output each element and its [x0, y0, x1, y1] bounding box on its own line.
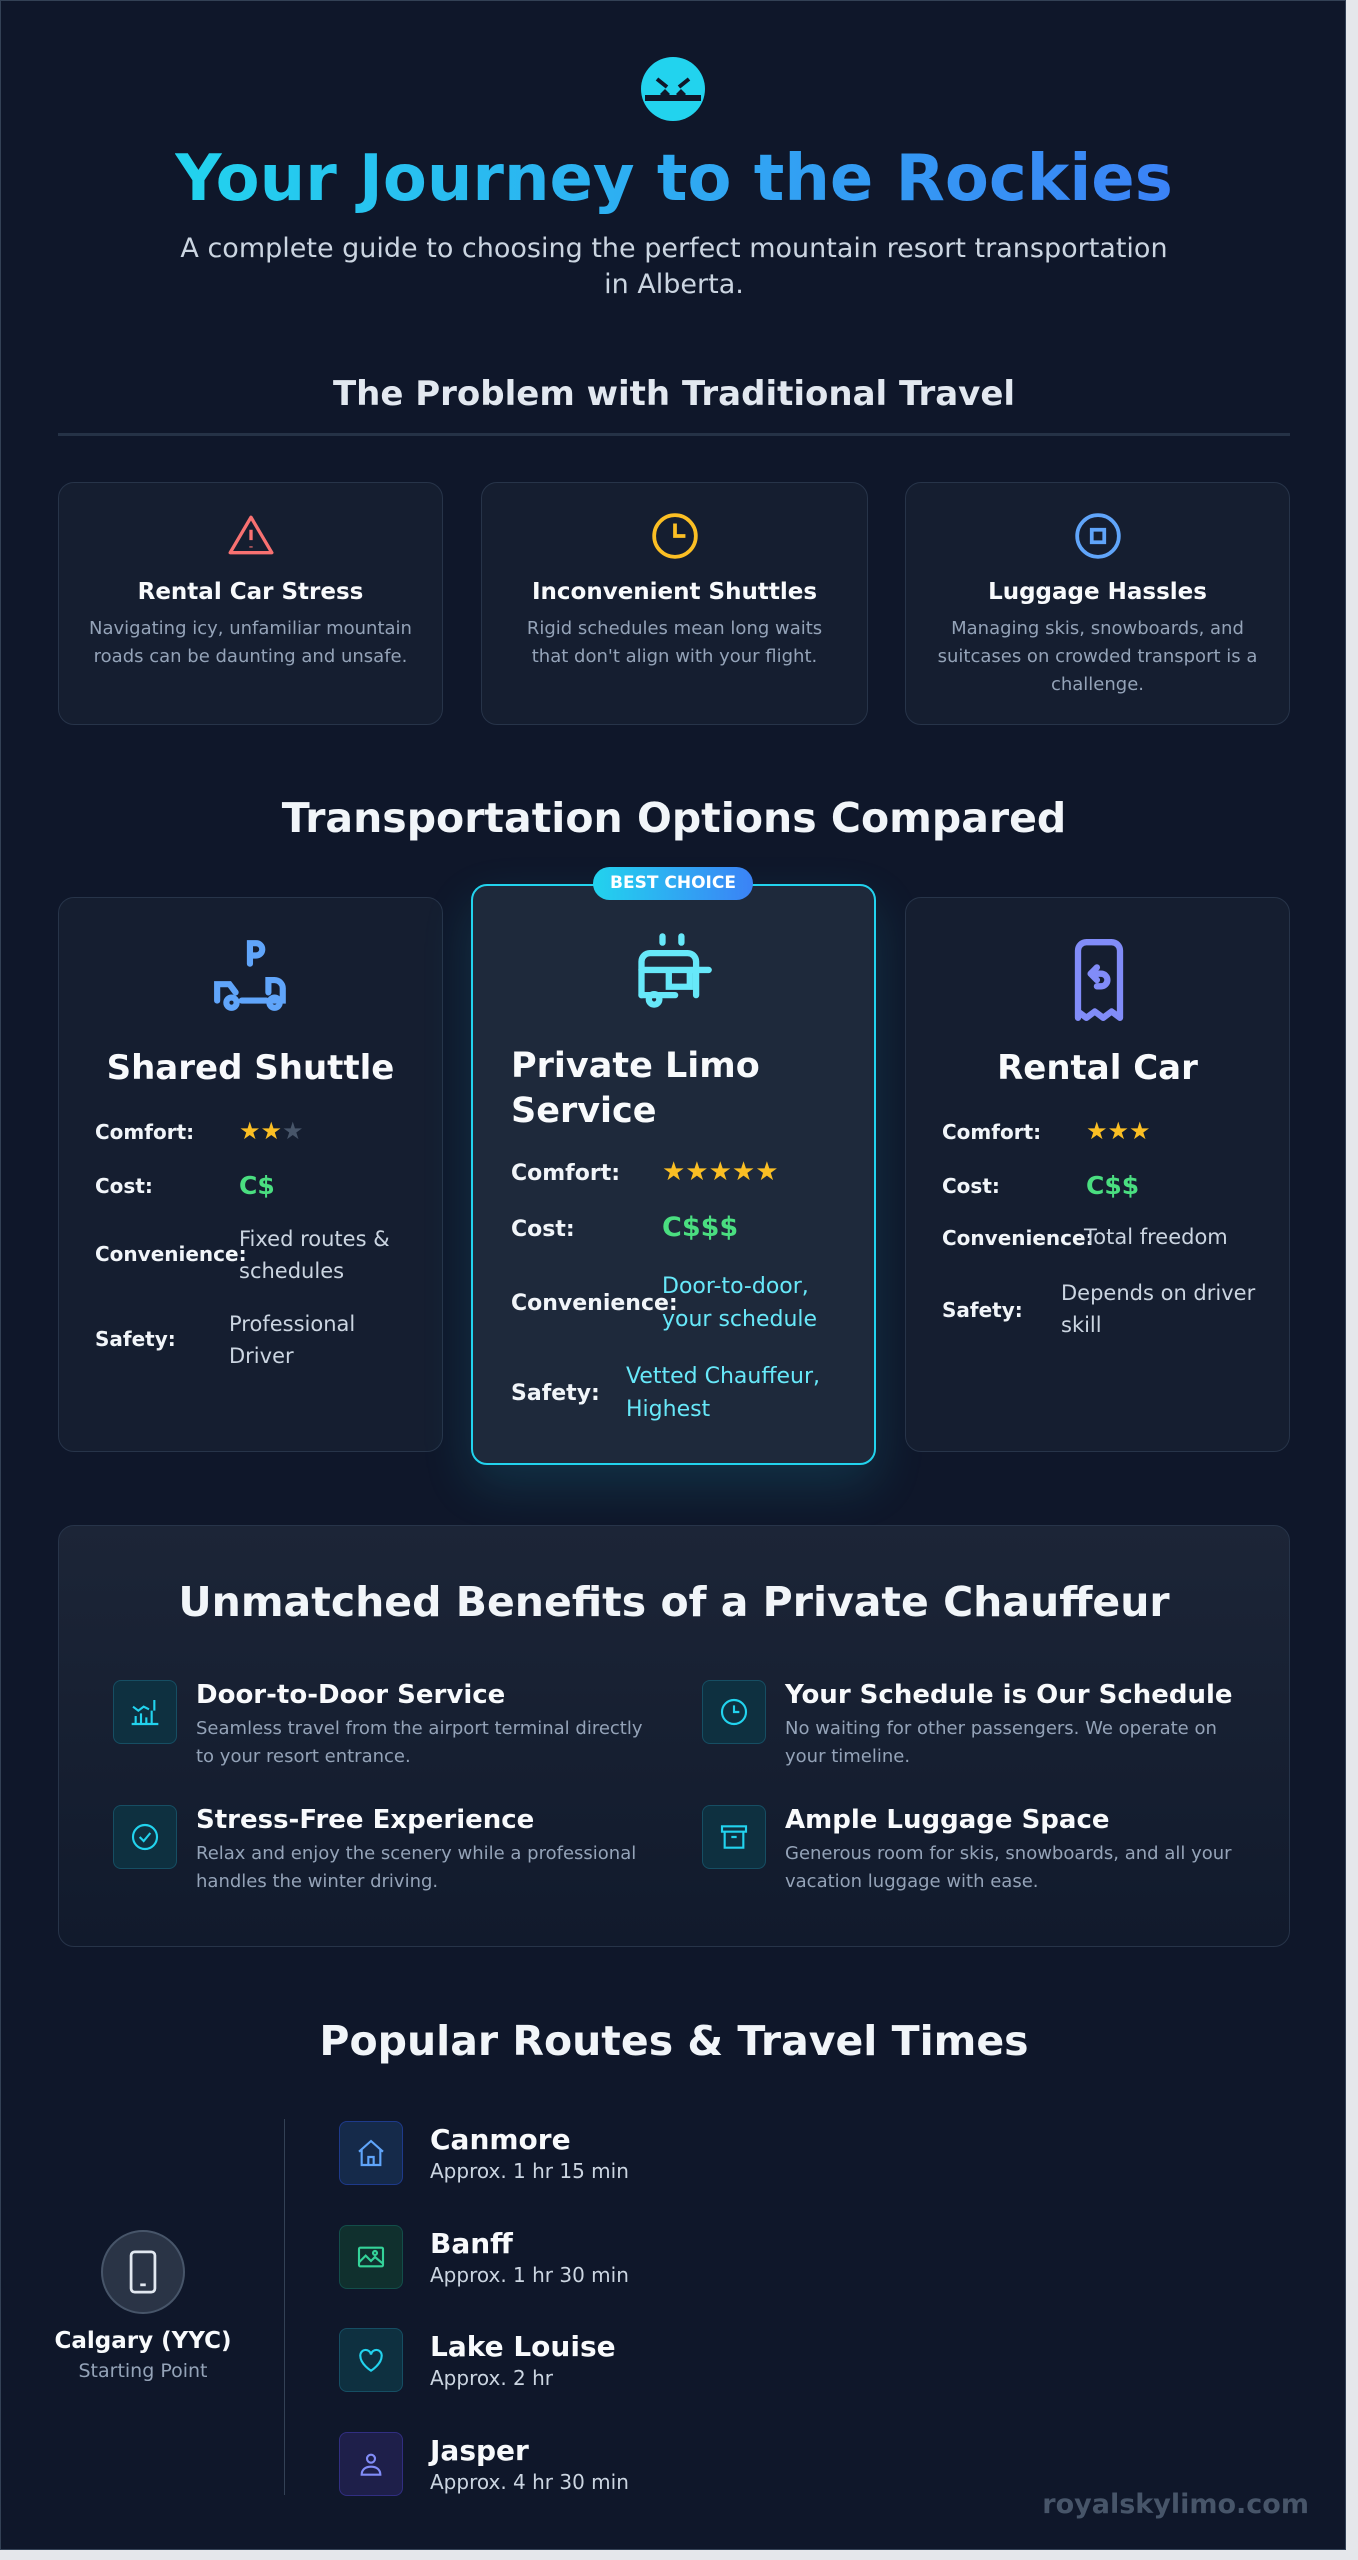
- benefit: schedule: Your Schedule is Our Schedule: [785, 1680, 1233, 1710]
- panel: rental car: Total freedom: [1084, 1225, 1228, 1249]
- panel: shared shuttle: Fixed routes & schedules: [239, 1227, 390, 1283]
- panel: shared shuttle: C$: [239, 1171, 275, 1200]
- title: Rental Car: [997, 1048, 1198, 1088]
- route: Lake Louise: Approx. 2 hr: [430, 2366, 553, 2390]
- benefit: luggage: Ample Luggage Space: [785, 1805, 1110, 1835]
- panel: luggage hassles: [905, 482, 1290, 725]
- route: Banff: [339, 2225, 629, 2289]
- panel: private limo (best choice): ★★★★★: [662, 1157, 779, 1187]
- heading: problem: The Problem with Traditional Travel: [333, 374, 1015, 414]
- panel: shared shuttle: Convenience:: [95, 1242, 247, 1266]
- panel: shared shuttle: ★★★: [239, 1117, 304, 1145]
- panel: shared shuttle: [58, 897, 443, 1452]
- icon: logo: [641, 57, 705, 121]
- benefit: stress-free: Relax and enjoy the scenery while a professional handles the winter driving.: [196, 1843, 636, 1892]
- icon: clock: [652, 513, 698, 559]
- panel: rental car: [905, 897, 1290, 1452]
- panel: shared shuttle: Safety:: [95, 1327, 176, 1351]
- panel: rental car: Safety:: [942, 1298, 1023, 1322]
- title: Service: [511, 1091, 657, 1131]
- icon: square circle: [1075, 513, 1121, 559]
- panel: private limo (best choice): Cost:: [511, 1217, 575, 1242]
- badge: [593, 867, 753, 900]
- benefit: luggage: Generous room for skis, snowboards, and all your vacation luggage with ease.: [785, 1843, 1232, 1892]
- benefit: door-to-door: Door-to-Door Service: [196, 1680, 505, 1710]
- benefit: door-to-door: Seamless travel from the airport terminal directly to your resort entrance.: [196, 1718, 643, 1767]
- benefit: schedule: No waiting for other passengers. We operate on your timeline.: [785, 1718, 1217, 1767]
- rows: Comfort:: [95, 1120, 194, 1144]
- panel: rental car: Cost:: [942, 1174, 1000, 1198]
- origin: Calgary: Calgary (YYC): [54, 2328, 232, 2354]
- panel: shared shuttle: Professional Driver: [229, 1312, 355, 1368]
- heading: options compared: Transportation Options Compared: [282, 794, 1066, 842]
- origin: Calgary: [54, 2230, 232, 2382]
- route: Jasper: Jasper: [430, 2434, 529, 2467]
- benefit: stress-free: Stress-Free Experience: [196, 1805, 534, 1835]
- origin: Calgary: Starting Point: [78, 2360, 208, 2382]
- panel: rental car stress: [58, 482, 443, 725]
- title: Private Limo: [511, 1046, 760, 1086]
- rows: Comfort:: [511, 1161, 620, 1186]
- badge: BEST CHOICE: [610, 873, 736, 893]
- route: Canmore: [339, 2121, 629, 2185]
- icon: phone: [101, 2230, 185, 2314]
- route: Banff: Approx. 1 hr 30 min: [430, 2263, 629, 2287]
- route: Jasper: Approx. 4 hr 30 min: [430, 2470, 629, 2494]
- heading: routes: Popular Routes & Travel Times: [319, 2017, 1029, 2065]
- panel: benefits: [58, 1525, 1290, 1947]
- footer: website: royalskylimo.com: [1042, 2489, 1309, 2520]
- route: Lake Louise: [339, 2328, 616, 2392]
- panel: rental car stress: Navigating icy, unfamiliar mountain roads can be daunting and unsafe.: [89, 618, 412, 667]
- panel: rental car: Depends on driver skill: [1061, 1281, 1255, 1337]
- panel: private limo (best choice): [471, 884, 876, 1465]
- panel: private limo (best choice): Vetted Chauffeur, Highest: [626, 1364, 820, 1422]
- heading: Unmatched Benefits of a Private Chauffeur: [178, 1578, 1170, 1626]
- panel: private limo (best choice): Safety:: [511, 1381, 600, 1406]
- title: Shared Shuttle: [107, 1048, 394, 1088]
- route: Lake Louise: Lake Louise: [430, 2330, 616, 2363]
- route: Jasper: [339, 2432, 629, 2496]
- panel: luggage hassles: Managing skis, snowboards, and suitcases on crowded transport is a challenge.: [938, 618, 1257, 695]
- benefit: luggage: [702, 1805, 1232, 1892]
- panel: shared shuttle: Cost:: [95, 1174, 153, 1198]
- panel: rental car: C$$: [1086, 1171, 1139, 1200]
- title: Your Journey to the Rockies: [175, 142, 1173, 216]
- subtitle: A complete guide to choosing the perfect mountain resort transportation in Alberta.: [180, 233, 1168, 300]
- icon: warning: [228, 516, 274, 554]
- text: Inconvenient Shuttles: [532, 579, 817, 605]
- panel: private limo (best choice): Convenience:: [511, 1291, 678, 1316]
- icon: limo: [638, 933, 712, 1008]
- route: Canmore: Approx. 1 hr 15 min: [430, 2159, 629, 2183]
- text: Luggage Hassles: [988, 579, 1207, 605]
- icon: rental receipt: [1074, 939, 1124, 1021]
- benefit: stress-free: [113, 1805, 636, 1892]
- title: [511, 1046, 760, 1131]
- text: Rental Car Stress: [138, 579, 363, 605]
- panel: rental car: ★★★: [1086, 1117, 1151, 1145]
- benefit: schedule: [702, 1680, 1233, 1767]
- panel: private limo (best choice): C$$$: [662, 1212, 738, 1243]
- rows: Comfort:: [942, 1120, 1041, 1144]
- route: Banff: Banff: [430, 2227, 513, 2260]
- panel: private limo (best choice): Door-to-door, your schedule: [662, 1274, 817, 1332]
- benefit: door-to-door: [113, 1680, 643, 1767]
- panel: inconvenient shuttles: Rigid schedules mean long waits that don't align with your flight.: [527, 618, 822, 667]
- panel: rental car: Convenience:: [942, 1226, 1094, 1250]
- icon: shuttle: [214, 940, 286, 1011]
- panel: inconvenient shuttles: [481, 482, 868, 725]
- route: Canmore: Canmore: [430, 2123, 571, 2156]
